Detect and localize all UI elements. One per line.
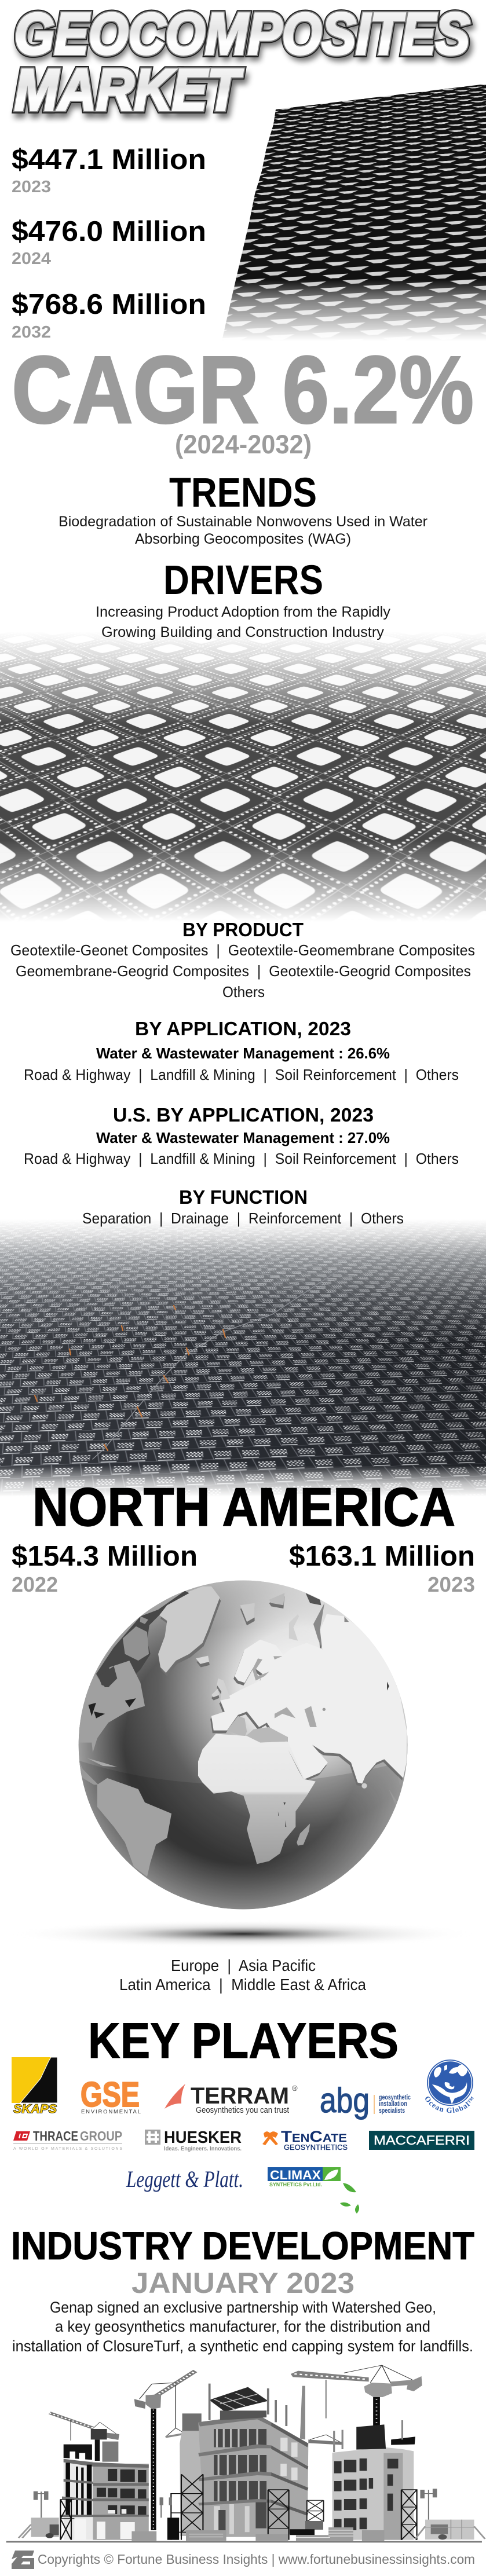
logo: Ocean Global	[425, 2060, 474, 2113]
by product: BY PRODUCT	[182, 919, 304, 940]
drivers: Increasing Product Adoption from the Rapidly	[96, 604, 390, 620]
north america values	[12, 1541, 475, 1596]
US by application: U.S. BY APPLICATION, 2023	[113, 1104, 374, 1126]
footer copyright: Copyrights © Fortune Business Insights | www.fortunebusinessinsights.com	[38, 2552, 475, 2567]
image: perforated geogrid	[0, 637, 486, 918]
logo: Maccaferri: MACCAFERRI	[374, 2133, 470, 2148]
market size values: $447.1 Million	[12, 144, 206, 175]
geoweb seam with orange ties	[35, 1268, 342, 1459]
by product: Geotextile-Geonet Composites | Geotextile-Geomembrane Composites	[10, 941, 475, 959]
by application	[24, 1018, 459, 1083]
logo: TenCate	[262, 2128, 348, 2152]
logo: Thrace Group: A WORLD OF MATERIALS & SOLUTIONS	[13, 2147, 122, 2151]
other regions: Latin America | Middle East & Africa	[119, 1976, 366, 1994]
market size values: $476.0 Million	[12, 216, 206, 247]
market size values: $768.6 Million	[12, 289, 206, 320]
title: MARKET	[14, 58, 243, 123]
trends: Biodegradation of Sustainable Nonwovens Used in Water	[59, 514, 427, 530]
US by application: Water & Wastewater Management : 27.0%	[96, 1129, 390, 1146]
north america values: $163.1 Million	[289, 1541, 475, 1572]
illustration: cranes	[50, 2365, 422, 2530]
development text: a key geosynthetics manufacturer, for the distribution and	[55, 2318, 430, 2335]
date: JANUARY 2023	[131, 2267, 355, 2299]
logo: Ocean Global: Ocean Global™	[425, 2096, 474, 2113]
logo: Climax Synthetics	[268, 2167, 359, 2214]
drivers: DRIVERS	[163, 558, 323, 603]
logo: Climax Synthetics: SYNTHETICS Pvt.Ltd.	[269, 2182, 322, 2187]
logo: Huesker: Ideas. Engineers. Innovations.	[164, 2146, 242, 2152]
market size values: 2023	[12, 178, 51, 196]
US by application: Road & Highway | Landfill & Mining | Soil Reinforcement | Others	[24, 1150, 459, 1167]
by function: BY FUNCTION	[179, 1186, 308, 1208]
logo: Huesker: HUESKER	[164, 2128, 242, 2147]
logo: Thrace Group	[13, 2128, 122, 2151]
illustration: right building	[332, 2420, 418, 2540]
globe shadow	[12, 1920, 475, 1948]
by function: Separation | Drainage | Reinforcement | Others	[82, 1210, 404, 1227]
logo: GSE: GSE	[81, 2075, 140, 2114]
trends	[59, 470, 427, 547]
logo: abg: abg	[320, 2081, 370, 2120]
north america values: 2023	[427, 1573, 475, 1596]
logo: abg: geosynthetic	[379, 2093, 411, 2101]
development text: installation of ClosureTurf, a synthetic end capping system for landfills.	[12, 2337, 473, 2355]
ground line	[6, 2541, 482, 2542]
logo: Leggett and Platt: Leggett & Platt.	[126, 2166, 243, 2192]
market size values	[12, 144, 206, 342]
globe	[78, 1581, 409, 1910]
by product: Geomembrane-Geogrid Composites | Geotextile-Geogrid Composites	[16, 962, 471, 980]
logo: TenCate: GEOSYNTHETICS	[284, 2143, 348, 2152]
logo: Climax Synthetics: CLIMAX	[270, 2168, 321, 2182]
logo: SKAPS: SKAPS	[13, 2102, 57, 2116]
development text	[12, 2299, 473, 2355]
logo: abg: installation	[379, 2099, 407, 2108]
footer logo	[12, 2551, 34, 2569]
logo: Terram: TERRAM	[191, 2083, 289, 2109]
US by application	[24, 1104, 459, 1167]
north america heading: NORTH AMERICA	[32, 1476, 455, 1537]
image: cellular geoweb field	[0, 1223, 486, 1495]
logo: abg	[320, 2081, 411, 2120]
land shadows	[159, 1590, 406, 1786]
logo: TenCate: TenCate	[281, 2128, 347, 2145]
title: MARKET	[16, 64, 247, 129]
logo: Terram: Geosynthetics you can trust	[196, 2105, 290, 2115]
logo: GSE: ENVIRONMENTAL	[81, 2109, 141, 2115]
north america values: $154.3 Million	[12, 1541, 198, 1572]
logo: SKAPS	[12, 2057, 57, 2116]
by function	[82, 1186, 404, 1227]
illustration: centre building	[180, 2384, 308, 2537]
illustration: left building	[60, 2442, 149, 2540]
north america values: 2022	[12, 1573, 58, 1596]
illustration: construction site	[6, 2365, 485, 2542]
title: MARKET	[14, 58, 243, 123]
title: MARKET	[14, 58, 243, 123]
by application: Road & Highway | Landfill & Mining | Soil Reinforcement | Others	[24, 1066, 459, 1083]
illustration: scaffolds and site equipment	[19, 2474, 485, 2541]
drivers: Growing Building and Construction Industry	[101, 624, 385, 640]
other regions	[119, 1956, 366, 1994]
drivers	[96, 558, 390, 640]
logo: Thrace Group: GROUP	[80, 2128, 122, 2143]
logo: Thrace Group: THRACE	[33, 2128, 78, 2143]
other regions: Europe | Asia Pacific	[171, 1956, 316, 1974]
market size values: 2024	[12, 250, 51, 268]
logo: Maccaferri	[369, 2131, 474, 2150]
CAGR: (2024-2032)	[175, 430, 312, 459]
by product: Others	[222, 983, 265, 1001]
development text: Genap signed an exclusive partnership with Watershed Geo,	[50, 2299, 436, 2316]
logo: Terram	[165, 2083, 298, 2115]
market size values: 2032	[12, 323, 51, 342]
by product	[10, 919, 475, 1001]
by application: BY APPLICATION, 2023	[135, 1018, 351, 1039]
logo: Terram: ®	[292, 2084, 298, 2093]
logo: Huesker	[145, 2128, 242, 2152]
trends: Absorbing Geocomposites (WAG)	[135, 531, 351, 547]
by application: Water & Wastewater Management : 26.6%	[96, 1045, 390, 1062]
logo: abg: specialists	[379, 2106, 405, 2115]
key players heading: KEY PLAYERS	[88, 2013, 399, 2069]
title	[14, 2, 473, 129]
trends: TRENDS	[169, 470, 317, 516]
image: black geonet mesh	[222, 84, 486, 338]
